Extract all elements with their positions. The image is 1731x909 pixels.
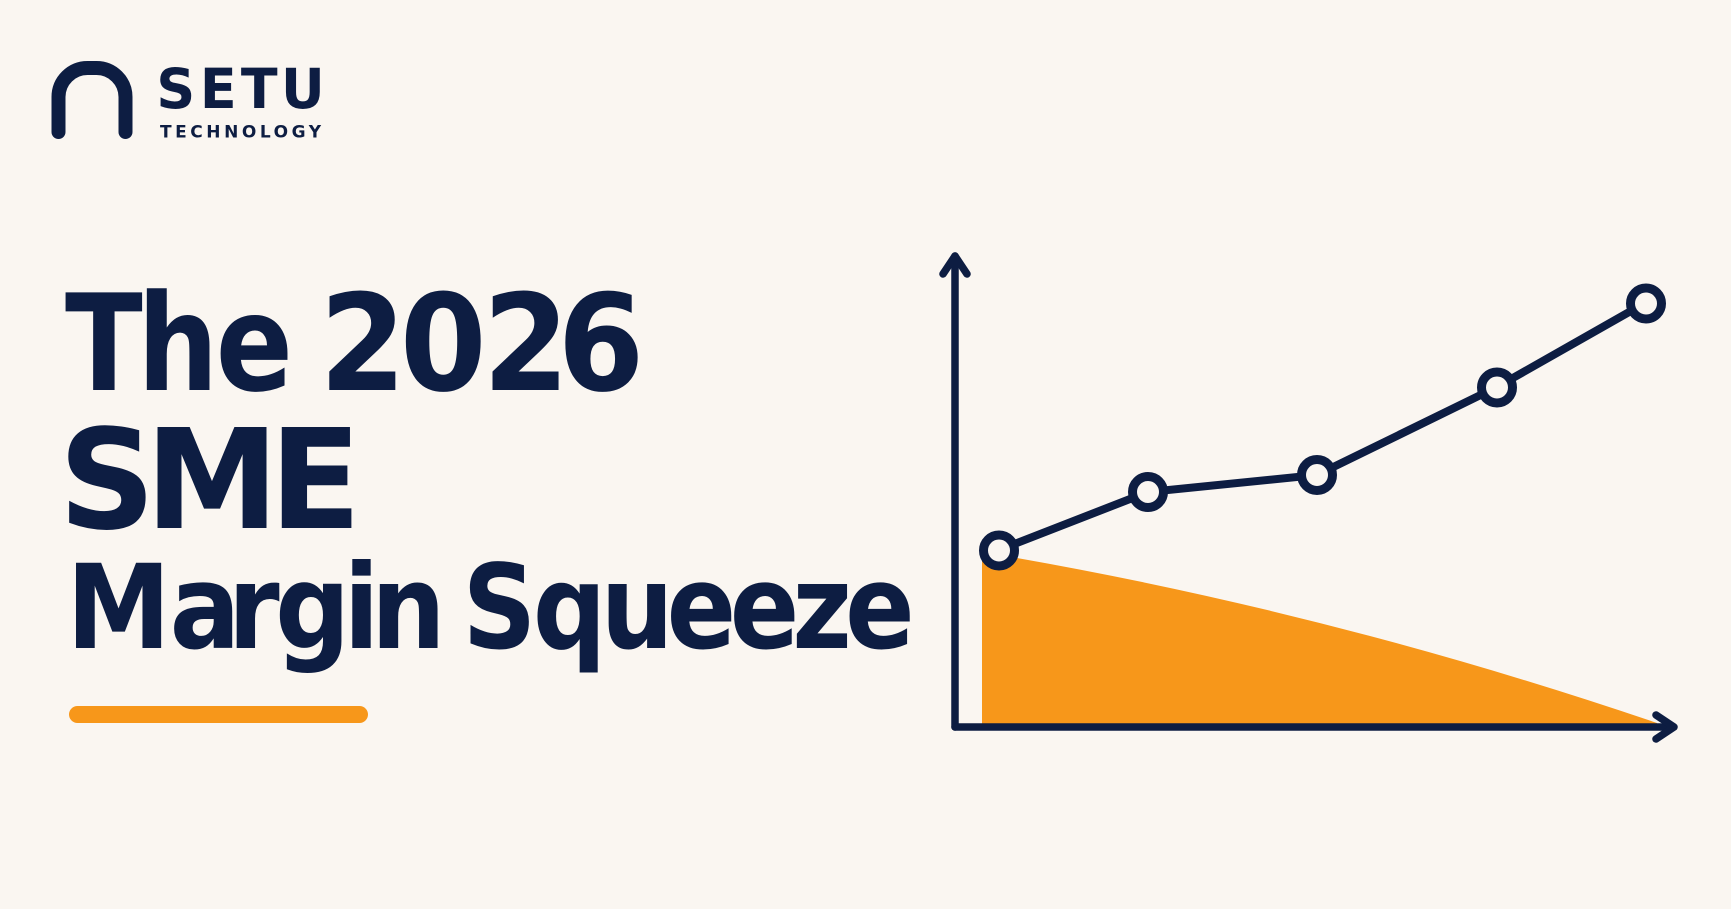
title line 3 [66, 540, 915, 676]
title line 2: SME [59, 400, 361, 561]
rising line [999, 303, 1645, 550]
orange accent bar [69, 706, 368, 723]
title line 1 [65, 266, 644, 422]
logo: Setu Technology [58, 56, 325, 142]
title line 3: Margin [66, 541, 446, 676]
chart: rising line over shrinking margin area [943, 256, 1674, 739]
icon: arch logo mark [58, 68, 126, 132]
title [59, 266, 915, 676]
title line 1: 2026 [319, 266, 644, 422]
orange margin area [982, 555, 1657, 724]
logo tagline: TECHNOLOGY: TECHNOLOGY [160, 122, 322, 142]
y axis arrow [943, 256, 967, 727]
title line 3: Squeeze [463, 540, 915, 676]
x axis arrow [955, 715, 1674, 739]
logo wordmark: SETU: SETU [156, 56, 325, 121]
line markers [984, 288, 1662, 566]
title line 1: The [65, 267, 293, 422]
